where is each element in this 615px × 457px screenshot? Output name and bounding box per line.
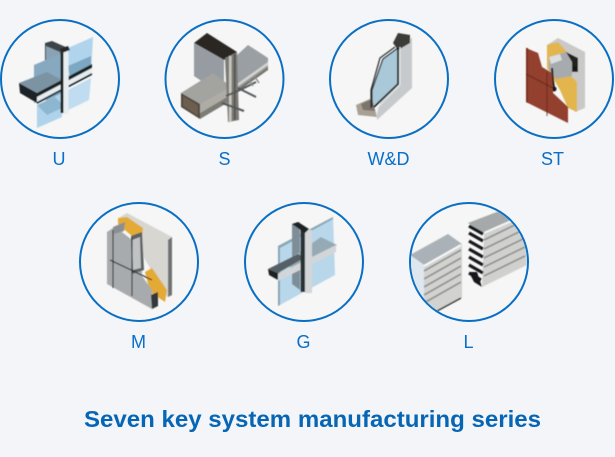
label M: M: [131, 332, 146, 352]
label ST: ST: [541, 149, 564, 169]
series U item: [1, 20, 119, 169]
label L: L: [463, 332, 474, 352]
circle frame L: [410, 203, 528, 321]
series G item: [245, 203, 363, 352]
icon: L louver section: [410, 210, 527, 311]
icon: U curtain wall section: [19, 37, 93, 128]
circle frame ST: [495, 20, 613, 138]
circle frame S: [166, 20, 284, 138]
label W&D: W&D: [368, 149, 410, 169]
label S: S: [218, 149, 231, 169]
circle frame W&D: [330, 20, 448, 138]
label U: U: [52, 149, 66, 169]
series S item: [166, 20, 284, 169]
icon: G glazing section: [268, 217, 337, 306]
series M item: [80, 203, 198, 352]
icon: S steel section: [181, 33, 268, 122]
circle frame M: [80, 203, 198, 321]
series ST item: [495, 20, 613, 169]
circle frame G: [245, 203, 363, 321]
circle frame U: [1, 20, 119, 138]
label G: G: [296, 332, 311, 352]
title: Seven key system manufacturing series: [84, 406, 541, 432]
icon: W&D window section: [356, 33, 412, 120]
icon: M metal panel section: [107, 213, 172, 309]
series L item: [410, 203, 528, 352]
icon: ST stone cladding section: [526, 38, 585, 123]
series W&D item: [330, 20, 448, 169]
